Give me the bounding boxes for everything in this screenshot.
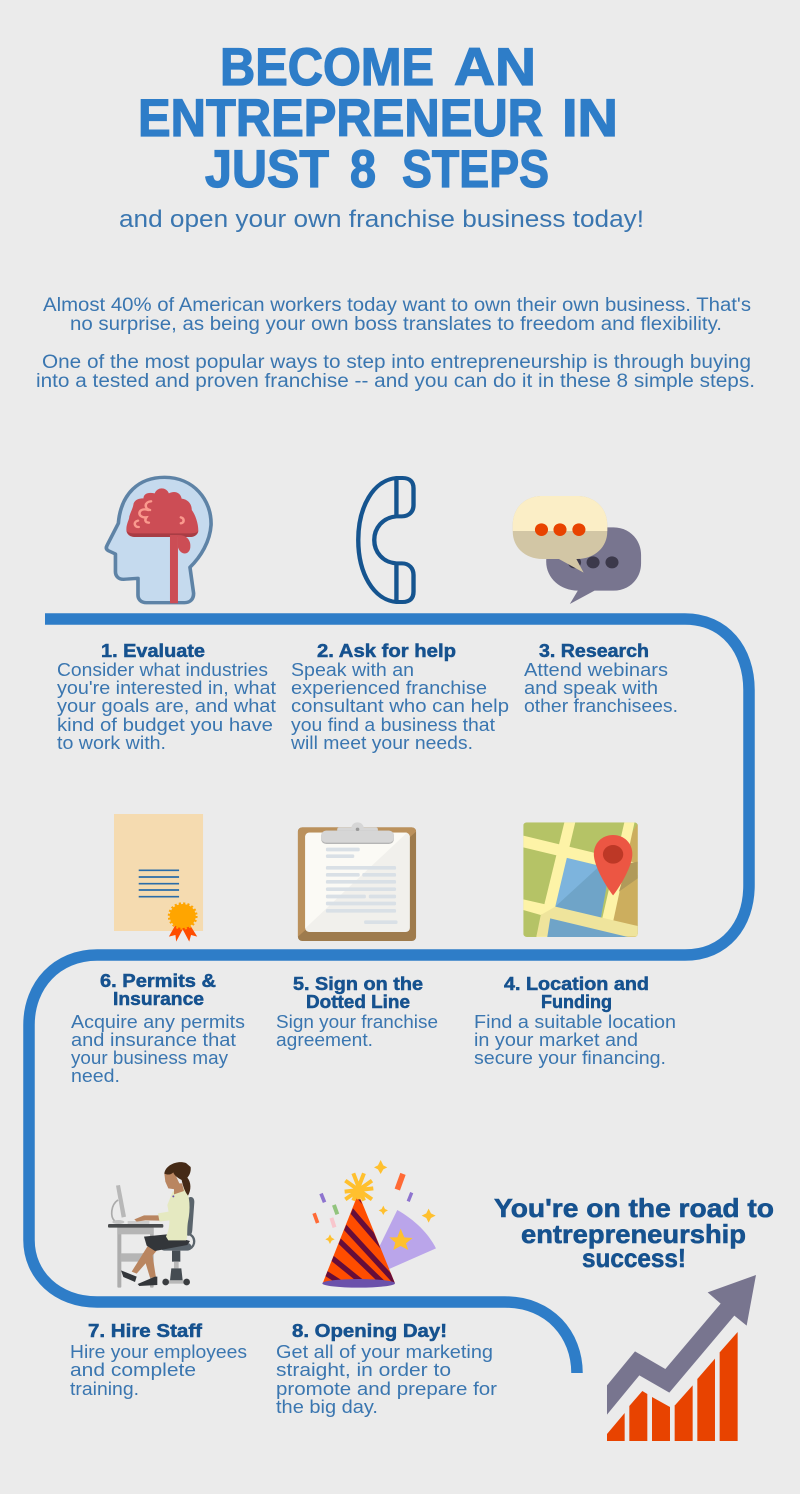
step 6 text: Insurance — [113, 989, 204, 1009]
step 6 text: and insurance that — [71, 1029, 236, 1050]
step 5 text: Dotted Line — [306, 992, 410, 1012]
icon: growth chart with arrow — [607, 1275, 756, 1441]
step 4 text: Funding — [541, 992, 612, 1012]
closing message: success! — [582, 1243, 686, 1273]
icon: clipboard — [298, 822, 416, 941]
step 7 text: training. — [70, 1378, 139, 1399]
closing message — [494, 1193, 774, 1273]
step 7 text: and complete — [70, 1359, 196, 1380]
title — [138, 38, 618, 199]
step 4 text: secure your financing. — [474, 1047, 666, 1068]
title: 8 — [350, 140, 376, 199]
step 6 text: Acquire any permits — [71, 1011, 245, 1032]
step 2 text: Speak with an — [291, 659, 414, 680]
intro text: no surprise, as being your own boss translates to freedom and flexibility. — [70, 314, 722, 335]
step 5 text — [276, 974, 438, 1050]
step 8 text: the big day. — [276, 1396, 378, 1417]
step 5 text: Sign your franchise — [276, 1011, 438, 1032]
title: STEPS — [402, 140, 549, 199]
step 1 text: 1. Evaluate — [101, 641, 205, 661]
step 2 text: you find a business that — [291, 714, 495, 735]
step 4 text: in your market and — [474, 1029, 638, 1050]
step 1 text: Consider what industries — [57, 659, 268, 680]
step 2 text: consultant who can help — [291, 695, 509, 716]
step 3 text — [524, 641, 678, 716]
step 2 text: experienced franchise — [291, 677, 487, 698]
step 4 text — [474, 974, 676, 1068]
title: JUST — [205, 140, 329, 199]
icon: brain in head — [106, 477, 211, 603]
title: BECOME — [220, 38, 434, 97]
intro text: into a tested and proven franchise -- and you can do it in these 8 simple steps. — [36, 371, 755, 392]
step 7 text — [70, 1321, 247, 1399]
icon: woman at desk — [108, 1162, 194, 1288]
step 5 text: agreement. — [276, 1029, 373, 1050]
step 1 text: to work with. — [57, 732, 166, 753]
step 3 text: and speak with — [524, 677, 658, 698]
icon: map with pin — [523, 822, 638, 937]
intro text — [36, 295, 755, 392]
step 6 text: 6. Permits & — [100, 971, 216, 991]
title: ENTREPRENEUR — [138, 89, 543, 148]
icon: telephone — [358, 478, 414, 602]
step 1 text: your goals are, and what — [57, 695, 276, 716]
step 3 text: 3. Research — [539, 641, 649, 661]
step 5 text: 5. Sign on the — [293, 974, 423, 994]
step 8 text: promote and prepare for — [276, 1378, 497, 1399]
step 3 text: other franchisees. — [524, 695, 678, 716]
step 4 text: Find a suitable location — [474, 1011, 676, 1032]
subtitle: and open your own franchise business today! — [119, 206, 644, 233]
step 8 text: straight, in order to — [276, 1359, 451, 1380]
step 6 text — [71, 971, 245, 1086]
step 8 text — [276, 1321, 497, 1417]
step 6 text: need. — [71, 1065, 120, 1086]
step 8 text: 8. Opening Day! — [292, 1321, 447, 1341]
step 2 text: 2. Ask for help — [317, 641, 456, 661]
step 3 text: Attend webinars — [524, 659, 668, 680]
icon: party hat — [312, 1160, 436, 1288]
step 7 text: 7. Hire Staff — [88, 1321, 203, 1341]
icon: speech bubbles — [513, 496, 641, 604]
step 7 text: Hire your employees — [70, 1341, 247, 1362]
step 2 text — [290, 641, 509, 753]
step 8 text: Get all of your marketing — [276, 1341, 493, 1362]
icon: certificate — [114, 814, 203, 942]
title: AN — [454, 38, 536, 97]
step 1 text: kind of budget you have — [57, 714, 273, 735]
title: IN — [562, 89, 618, 148]
intro text: One of the most popular ways to step into entrepreneurship is through buying — [42, 352, 751, 373]
step 6 text: your business may — [71, 1047, 229, 1068]
step 4 text: 4. Location and — [504, 974, 649, 994]
closing message: You're on the road to — [494, 1193, 774, 1223]
closing message: entrepreneurship — [521, 1219, 746, 1249]
step 1 text — [57, 641, 276, 753]
intro text: Almost 40% of American workers today want to own their own business. That's — [43, 295, 751, 316]
step 1 text: you're interested in, what — [57, 677, 276, 698]
step 2 text: will meet your needs. — [290, 732, 473, 753]
road path — [29, 619, 749, 1373]
